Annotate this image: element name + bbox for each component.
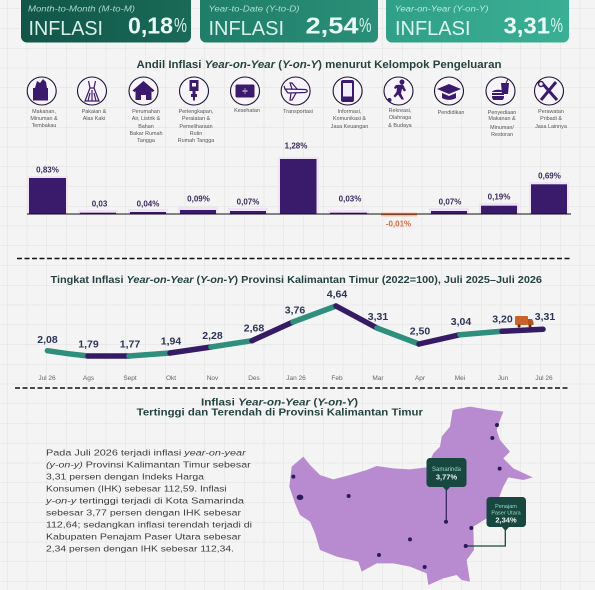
callout: Penajam Paser Utara: Paser Utara — [491, 510, 522, 516]
icon captions: Tangga — [137, 138, 155, 144]
card: year-on-year inflation — [386, 0, 569, 42]
map: East Kalimantan province — [289, 407, 533, 585]
icon captions: Olahraga — [389, 115, 411, 121]
card: year-to-date inflation: % — [359, 15, 372, 37]
text block: summary paragraph: 112,64; sedangkan inflasi terendah terjadi di — [46, 520, 252, 530]
card: year-on-year inflation: 3,31 — [504, 12, 550, 38]
icon: health box — [230, 77, 260, 105]
line chart: monthly year-on-year inflation — [37, 289, 555, 382]
month axis labels: Feb — [331, 375, 343, 382]
card: year-to-date inflation — [200, 0, 378, 42]
icon captions: Penyediaan — [488, 110, 516, 116]
text block: summary paragraph: 3,31 persen dengan Indeks Harga — [46, 472, 204, 482]
icon: scissors and comb — [534, 77, 564, 105]
month axis labels: Okt — [166, 375, 176, 382]
month axis labels: Ags — [83, 375, 95, 382]
icon: football player — [384, 77, 413, 105]
icon captions: Pendidikan — [438, 110, 464, 116]
line chart: monthly year-on-year inflation: 2,08 — [37, 334, 58, 346]
icon captions: Informasi, — [338, 109, 362, 115]
bar chart: contribution by group: 0,83% — [36, 166, 59, 174]
icon captions: Pemeliharaan — [179, 124, 213, 130]
line chart: monthly year-on-year inflation: 2,68 — [244, 323, 264, 335]
card: year-to-date inflation: 2,54 — [306, 12, 359, 38]
month axis labels: Jun — [498, 375, 509, 382]
text block: summary paragraph — [45, 448, 252, 554]
callout: Samarinda — [426, 458, 467, 524]
icon captions: Rumah Tangga — [178, 138, 214, 144]
line chart: monthly year-on-year inflation: 3,20 — [492, 314, 513, 326]
card: month-to-month inflation — [21, 0, 191, 42]
month axis labels: Jan 26 — [286, 375, 306, 382]
month axis labels: Sept — [123, 375, 137, 382]
icon captions: Komunikasi & — [333, 116, 366, 122]
icon captions: Bakar Rumah — [130, 131, 162, 137]
month axis labels: Des — [248, 375, 261, 382]
icon captions: Jasa Keuangan — [331, 124, 368, 130]
callout: Samarinda: Samarinda — [432, 467, 462, 473]
icon captions: Minuman/ — [490, 125, 514, 131]
icon: smartphone — [333, 77, 362, 105]
icon captions: Peralatan & — [182, 116, 210, 122]
bar chart: contribution by group: 0,04% — [137, 200, 159, 208]
bar chart: contribution by group: 0,03% — [339, 194, 361, 204]
month axis labels: Mar — [372, 375, 384, 382]
card: year-to-date inflation: INFLASI — [208, 18, 284, 40]
icon captions: Air, Listrik & — [132, 116, 161, 122]
card: month-to-month inflation: INFLASI — [28, 18, 103, 40]
line chart: monthly year-on-year inflation: 3,04 — [451, 316, 471, 328]
month axis labels: Nov — [207, 375, 219, 382]
icon: food basket — [27, 77, 56, 105]
bar chart: contribution by group: 0,03 — [92, 200, 108, 208]
bar chart: contribution by group — [27, 142, 571, 228]
bar chart: contribution by group: 0,07% — [237, 198, 259, 206]
bar chart: contribution by group: 0,69% — [538, 172, 561, 180]
icon captions: Makanan, — [32, 109, 56, 115]
card: month-to-month inflation: 0,18 — [128, 12, 173, 38]
card: year-on-year inflation: Year-on-Year (Y-on-Y) — [394, 4, 489, 14]
month axis labels: Apr — [415, 375, 426, 382]
card: year-to-date inflation: Year-to-Date (Y-to-D) — [208, 4, 300, 14]
line chart: monthly year-on-year inflation: 1,79 — [78, 339, 99, 351]
icon: airplane — [281, 77, 310, 105]
bar chart: contribution by group: 0,09% — [187, 194, 210, 204]
text block: summary paragraph: Kabupaten Penajam Paser Utara sebesar — [46, 532, 241, 542]
icon captions: Kesehatan — [234, 108, 260, 114]
callout: Penajam Paser Utara: Penajam — [495, 504, 517, 510]
icon: dress — [78, 77, 106, 105]
icon: burger and drink — [486, 77, 515, 105]
month axis labels: Jul 26 — [38, 375, 56, 382]
bar chart: contribution by group: 0,19% — [488, 192, 510, 202]
text block: summary paragraph: Konsumen (IHK) sebesar 112,59. Inflasi — [46, 484, 227, 494]
card: month-to-month inflation: % — [174, 15, 187, 37]
callout: Penajam Paser Utara: 2,34% — [495, 516, 517, 524]
heading: contribution by expenditure group: Andil Inflasi Year-on-Year (Y-on-Y ) menurut Kelompok Pengeluaran — [136, 59, 502, 71]
icon captions: & Budaya — [388, 123, 412, 129]
month axis labels: Jul 26 — [535, 375, 553, 382]
heading: provincial inflation trend: Tingkat Inflasi Year-on-Year (Y-on-Y) Provinsi Kalimantan Timur (2022=100), Juli 2025–Juli 2026 — [50, 275, 542, 286]
text block: summary paragraph: sebesar 3,77 persen dengan IHK sebesar — [46, 508, 241, 518]
icon: appliance plug — [180, 77, 208, 105]
heading: highest and lowest inflation: Tertinggi dan Terendah di Provinsi Kalimantan Timur — [137, 406, 423, 418]
icon: house — [129, 77, 158, 105]
card: year-on-year inflation: INFLASI — [395, 18, 470, 40]
icon captions: Alas Kaki — [83, 116, 105, 122]
icon captions: Tembakau — [32, 123, 56, 129]
icon captions: Pakaian & — [82, 109, 107, 115]
line chart: monthly year-on-year inflation: 1,77 — [120, 339, 140, 351]
line chart: monthly year-on-year inflation: 2,28 — [202, 330, 223, 342]
line chart: monthly year-on-year inflation: 3,76 — [285, 305, 305, 317]
icon captions: Makanan & — [488, 116, 516, 122]
icon captions: Rutin — [190, 131, 202, 137]
icon: graduation cap — [434, 77, 464, 105]
bar chart: contribution by group: -0,01% — [386, 220, 411, 228]
icon captions: Perawatan — [538, 109, 564, 115]
line chart: monthly year-on-year inflation: 4,64 — [327, 289, 347, 301]
icon captions: Minuman & — [30, 116, 58, 122]
card: year-on-year inflation: % — [550, 15, 563, 37]
icon captions: Perumahan — [132, 109, 160, 115]
text block: summary paragraph: y-on-y tertinggi terjadi di Kota Samarinda — [45, 496, 244, 506]
icon captions: Rekreasi, — [389, 108, 412, 114]
icon captions: Restoran — [491, 132, 513, 138]
icon captions: Bahan — [138, 124, 154, 130]
heading: highest and lowest inflation: Inflasi Year-on-Year (Y-on-Y ) — [201, 396, 358, 408]
text block: summary paragraph: (y-on-y) Provinsi Kalimantan Timur sebesar — [46, 460, 251, 470]
month axis labels — [38, 375, 553, 382]
line chart: monthly year-on-year inflation: 3,31 — [368, 311, 388, 323]
card: month-to-month inflation: Month-to-Month (M-to-M) — [28, 4, 135, 14]
line chart: monthly year-on-year inflation: 1,94 — [161, 336, 181, 348]
icon captions: Jasa Lainnya — [535, 124, 567, 130]
heading: highest and lowest inflation — [137, 396, 423, 418]
icon captions: Pribadi & — [540, 116, 562, 122]
bar chart: contribution by group: 1,28% — [285, 142, 307, 150]
icon: truck — [515, 316, 534, 328]
text block: summary paragraph: 2,34 persen dengan IHK sebesar 112,34. — [46, 544, 234, 554]
icon captions: Transportasi — [283, 109, 313, 115]
callout: Samarinda: 3,77% — [436, 472, 457, 482]
icon row: expenditure groups — [27, 77, 563, 105]
line chart: monthly year-on-year inflation: 2,50 — [410, 326, 430, 338]
bar chart: contribution by group: 0,07% — [439, 198, 461, 206]
text block: summary paragraph: Pada Juli 2026 terjadi inflasi year-on-year — [46, 448, 247, 458]
line chart: monthly year-on-year inflation: 3,31 — [535, 311, 555, 323]
icon captions — [30, 108, 567, 144]
month axis labels: Mei — [455, 375, 465, 382]
icon captions: Perlengkapan, — [179, 109, 214, 115]
callout: Penajam Paser Utara — [464, 497, 526, 548]
